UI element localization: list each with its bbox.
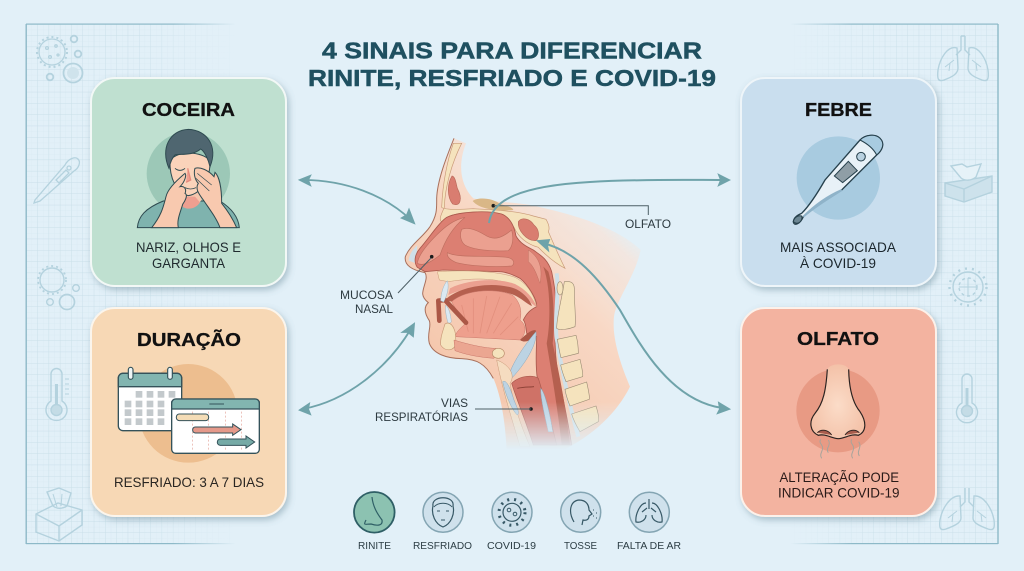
decorative icon: thermometer left xyxy=(34,158,79,203)
right grid frame xyxy=(790,24,999,544)
jaw bone xyxy=(441,323,456,350)
arrow: sinus to olfato card xyxy=(538,240,729,413)
legend: falta de ar: FALTA DE AR xyxy=(617,540,681,552)
nostril shading xyxy=(409,245,417,263)
dark palate band xyxy=(445,285,532,306)
upper and lower teeth xyxy=(441,281,451,324)
legend: tosse xyxy=(561,492,601,552)
soft palate fold xyxy=(528,250,541,283)
heading: olfato: OLFATO xyxy=(797,329,879,349)
turbinates xyxy=(417,217,514,267)
esophagus band xyxy=(543,267,570,445)
legend: falta de ar xyxy=(617,492,681,552)
callout: vias respiratorias: RESPIRATÓRIAS xyxy=(375,411,468,424)
vertebrae xyxy=(557,281,599,432)
caption: olfato: ALTERAÇÃO PODE xyxy=(780,469,899,485)
hard palate bone xyxy=(437,271,537,307)
legend: resfriado: RESFRIADO xyxy=(413,540,472,552)
caption: olfato xyxy=(778,469,900,500)
heading: coceira: COCEIRA xyxy=(142,100,235,120)
arrow: coceira to nose xyxy=(300,176,414,223)
decorative icon: tissue box right xyxy=(945,164,992,202)
caption: coceira xyxy=(136,239,241,271)
heading: febre: FEBRE xyxy=(805,100,872,120)
caption: febre: MAIS ASSOCIADA xyxy=(780,239,897,255)
legend: rinite xyxy=(354,492,395,552)
left grid frame xyxy=(26,24,236,544)
caption: duracao: RESFRIADO: 3 A 7 DIAS xyxy=(114,474,264,490)
decorative icon: tissue box lower left xyxy=(36,488,82,541)
larynx wall xyxy=(496,360,528,442)
decorative icon: virus cluster lower left xyxy=(38,266,79,310)
spine ligament xyxy=(556,273,578,437)
heading: duracao: DURAÇÃO xyxy=(137,329,241,350)
floor of mouth xyxy=(454,340,496,358)
title: RINITE, RESFRIADO E COVID-19 xyxy=(308,65,716,91)
sphenoid sinus xyxy=(518,219,539,241)
title xyxy=(308,38,716,91)
callout: mucosa nasal: MUCOSA xyxy=(340,290,393,302)
decorative icon: virus right xyxy=(950,268,986,306)
tongue fibres xyxy=(462,296,518,335)
panel: olfato xyxy=(741,308,936,516)
legend: resfriado xyxy=(413,492,472,552)
title: 4 SINAIS PARA DIFERENCIAR xyxy=(322,38,702,64)
callout: vias respiratorias xyxy=(375,398,533,424)
legend: rinite: RINITE xyxy=(358,540,391,552)
caption: olfato: INDICAR COVID-19 xyxy=(778,484,900,500)
soft palate pink xyxy=(448,280,537,307)
face outline xyxy=(405,138,493,378)
panel: duracao xyxy=(91,308,286,516)
callout: olfato: OLFATO xyxy=(625,219,671,231)
decorative icon: thermometer right xyxy=(956,374,978,423)
callout: vias respiratorias: VIAS xyxy=(441,398,468,410)
decorative icon: lungs lower right xyxy=(940,488,994,530)
decorative icon: lungs top right xyxy=(938,36,988,81)
hyoid xyxy=(492,348,504,358)
callout: mucosa nasal xyxy=(340,255,434,316)
arrow: olfato region to febre xyxy=(489,175,729,223)
cartilage strips xyxy=(503,381,518,415)
epiglottis xyxy=(510,332,536,378)
caption: coceira: GARGANTA xyxy=(152,255,226,271)
callout: mucosa nasal: NASAL xyxy=(355,304,394,316)
panel: coceira xyxy=(91,78,286,286)
decorative icon: virus cluster top left xyxy=(37,36,82,82)
icon: calendar and timeline xyxy=(118,364,259,463)
tongue xyxy=(452,291,525,340)
frontal sinus xyxy=(448,176,460,205)
legend: covid-19 xyxy=(487,492,536,552)
root of tongue xyxy=(520,330,536,342)
caption: febre: À COVID-19 xyxy=(800,255,876,271)
legend: tosse: TOSSE xyxy=(564,540,597,552)
skin and neck xyxy=(405,138,641,450)
icon: thermometer xyxy=(793,135,883,224)
icon: nose with smell waves xyxy=(796,364,880,458)
icon: person rubbing eyes and nose xyxy=(137,129,239,228)
forehead bone xyxy=(440,143,565,268)
panel: febre xyxy=(741,78,936,286)
olfactory bulb xyxy=(473,199,513,210)
mouth dark band xyxy=(438,300,466,323)
caption: coceira: NARIZ, OLHOS E xyxy=(136,239,241,255)
arrow: duracao to mouth xyxy=(300,324,414,414)
anatomy diagram: head cross-section xyxy=(405,138,641,450)
decorative icon: thermometer lower left xyxy=(46,368,69,420)
trachea xyxy=(512,376,557,445)
legend: covid-19: COVID-19 xyxy=(487,540,536,552)
callout: olfato xyxy=(492,204,671,231)
nasal cavity and pharynx xyxy=(415,212,572,445)
caption: febre xyxy=(780,239,897,271)
